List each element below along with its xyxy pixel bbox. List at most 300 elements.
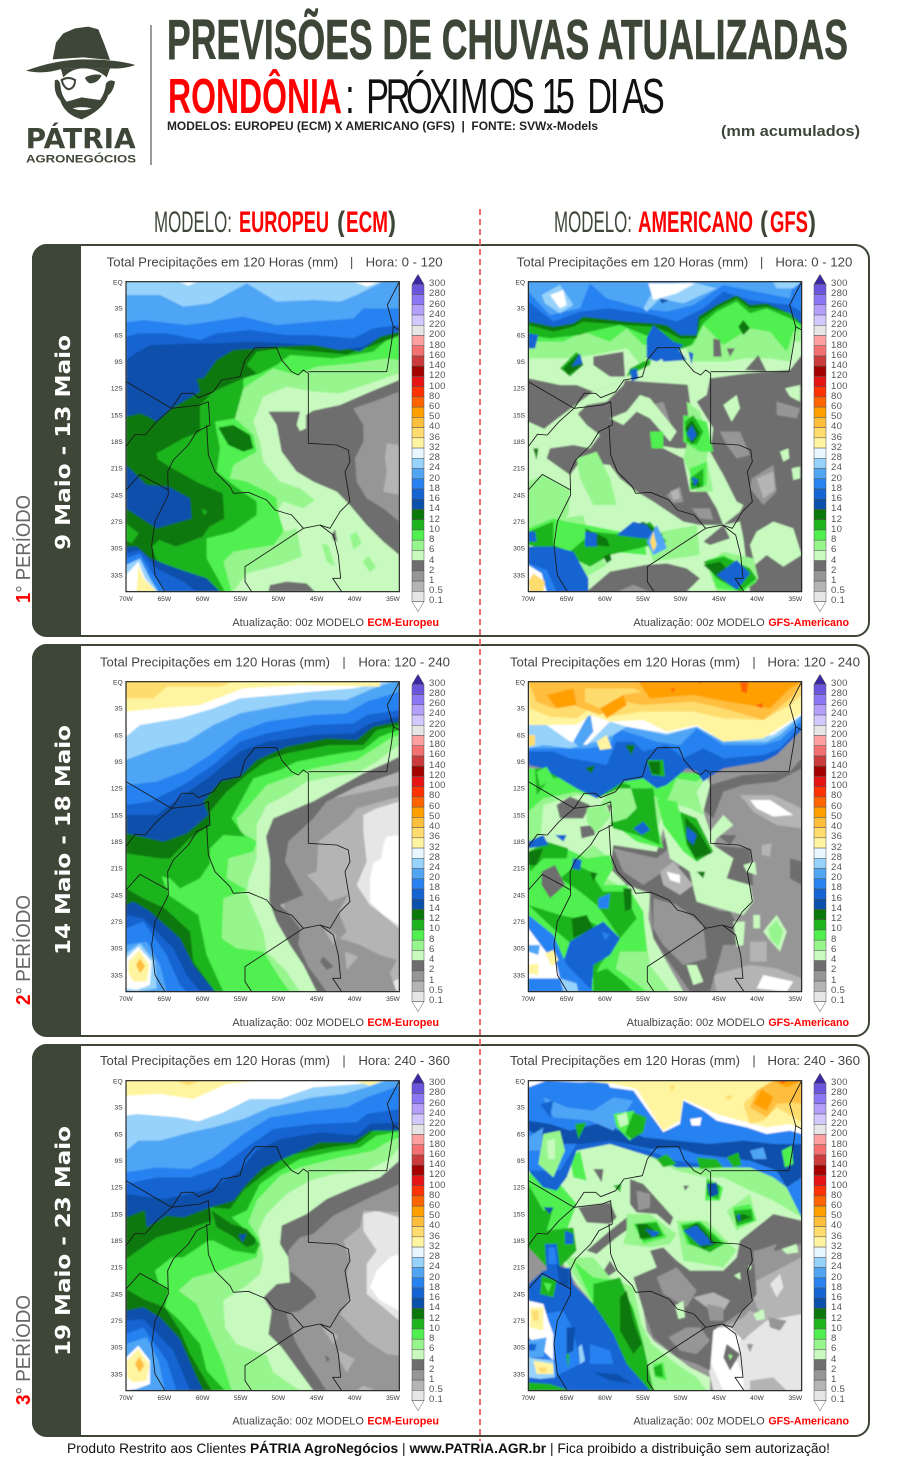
map panel: GFS 240-360: 220 bbox=[831, 1118, 848, 1129]
map panel: GFS 0-120: 200 bbox=[831, 329, 848, 340]
map panel: ECM 240-360: 60W bbox=[196, 1395, 210, 1402]
map panel: GFS 120-240: 4 bbox=[831, 954, 837, 965]
map panel: GFS 120-240: | bbox=[752, 655, 756, 669]
map panel: GFS 0-120: 50 bbox=[831, 411, 842, 422]
map panel: ECM 0-120 bbox=[106, 256, 446, 629]
map panel: GFS 120-240: 140 bbox=[831, 760, 848, 771]
map panel: ECM 120-240: 9S bbox=[115, 759, 123, 766]
map panel: GFS 0-120: 4 bbox=[831, 555, 837, 566]
map panel: ECM 240-360: 55W bbox=[234, 1395, 248, 1402]
map panel: GFS 240-360: 180 bbox=[831, 1139, 848, 1150]
map panel: ECM 120-240: 6 bbox=[429, 944, 435, 955]
map panel: GFS 120-240: 2 bbox=[831, 964, 837, 975]
map panel: ECM 120-240: 60 bbox=[429, 801, 440, 812]
map panel: ECM 120-240: 35W bbox=[386, 996, 401, 1003]
map panel: ECM 0-120: 0.5 bbox=[429, 585, 443, 596]
colour legend bbox=[412, 674, 424, 1011]
panel: 1st period bbox=[12, 244, 870, 637]
map panel: GFS 240-360: EQ bbox=[515, 1078, 525, 1085]
map panel: GFS 0-120: 3S bbox=[517, 306, 526, 313]
map panel: ECM 120-240: 10 bbox=[429, 923, 440, 934]
map panel: ECM 0-120: 80 bbox=[429, 391, 440, 402]
map panel: GFS 240-360: 6 bbox=[831, 1343, 837, 1354]
colour legend bbox=[814, 674, 826, 1011]
map panel: GFS 120-240: 200 bbox=[831, 729, 848, 740]
map panel: ECM 120-240: 260 bbox=[429, 698, 446, 709]
map panel: ECM 0-120: 240 bbox=[429, 309, 446, 320]
map panel: ECM 0-120: 12 bbox=[429, 514, 440, 525]
map panel: GFS 0-120: 27S bbox=[513, 519, 526, 526]
map panel: GFS 0-120: 80 bbox=[831, 391, 842, 402]
map panel: ECM 0-120: EQ bbox=[113, 279, 123, 286]
map panel: ECM 120-240: 300 bbox=[429, 678, 446, 689]
map panel: ECM 240-360: 33S bbox=[111, 1371, 123, 1378]
map panel: ECM 240-360: 27S bbox=[111, 1318, 123, 1325]
map panel: GFS 0-120: 30S bbox=[513, 546, 526, 553]
map panel: ECM 240-360: 18 bbox=[429, 1282, 440, 1293]
map panel: ECM 120-240: Total Precipitações em 120 Horas (mm) bbox=[100, 655, 330, 669]
map panel: GFS 240-360: 40W bbox=[750, 1395, 765, 1402]
title: (mm acumulados) bbox=[721, 123, 860, 140]
map panel: ECM 240-360: 70W bbox=[119, 1395, 134, 1402]
panel: 2nd period bbox=[12, 644, 870, 1037]
map panel: GFS 120-240 bbox=[510, 655, 860, 1029]
map panel: ECM 120-240 bbox=[100, 655, 450, 1029]
map panel: ECM 240-360: 180 bbox=[429, 1139, 446, 1150]
map panel: ECM 120-240: 24 bbox=[429, 862, 440, 873]
map panel: GFS 120-240: Hora: 120 - 240 bbox=[767, 655, 860, 669]
map panel: ECM 0-120: 40 bbox=[429, 421, 440, 432]
footer notice: Produto Restrito aos Clientes PÁTRIA AgroNegócios | www.PATRIA.AGR.br | Fica proibido a distribuição sem autorização! bbox=[67, 1440, 830, 1456]
map panel: GFS 120-240: 6S bbox=[517, 732, 526, 739]
map panel: GFS 120-240: 16 bbox=[831, 893, 842, 904]
map panel: GFS 120-240: 0.5 bbox=[831, 985, 845, 996]
map panel: GFS 0-120: 260 bbox=[831, 299, 848, 310]
map panel: GFS 120-240: 70W bbox=[521, 996, 536, 1003]
map panel: ECM 0-120: 200 bbox=[429, 329, 446, 340]
map panel: ECM 240-360: 6S bbox=[115, 1131, 123, 1138]
map panel: ECM 120-240: 45W bbox=[310, 996, 324, 1003]
map panel: ECM 0-120: 12S bbox=[111, 386, 123, 393]
map panel: ECM 120-240: 160 bbox=[429, 749, 446, 760]
center dashed separator bbox=[479, 209, 481, 1441]
map panel: ECM 0-120: 30S bbox=[111, 546, 123, 553]
map panel: GFS 0-120: 240 bbox=[831, 309, 848, 320]
map panel: ECM 0-120: 140 bbox=[429, 360, 446, 371]
map panel: GFS 120-240: 3S bbox=[517, 705, 526, 712]
period labels: 3° PERÍODO bbox=[12, 1295, 35, 1405]
map panel: ECM 0-120: | bbox=[350, 256, 353, 270]
map panel: ECM 240-360: 24S bbox=[111, 1291, 123, 1298]
map panel: GFS 240-360: 65W bbox=[560, 1395, 574, 1402]
map panel: GFS 240-360: 55W bbox=[636, 1395, 651, 1402]
map panel: ECM 120-240: 180 bbox=[429, 739, 446, 750]
map panel: GFS 120-240: 180 bbox=[831, 739, 848, 750]
map panel: GFS 0-120: 16 bbox=[831, 493, 842, 504]
map panel: GFS 0-120: 6 bbox=[831, 544, 837, 555]
rainfall map bbox=[523, 676, 807, 996]
map panel: ECM 0-120: 27S bbox=[111, 519, 123, 526]
map panel: GFS 240-360: 18 bbox=[831, 1282, 842, 1293]
map panel: ECM 120-240: 200 bbox=[429, 729, 446, 740]
map panel: GFS 240-360: 45W bbox=[712, 1395, 727, 1402]
map panel: GFS 0-120: 32 bbox=[831, 442, 842, 453]
map panel: ECM 0-120: Total Precipitações em 120 Horas (mm) bbox=[107, 256, 338, 270]
map panel: ECM 120-240: 80 bbox=[429, 790, 440, 801]
map panel: GFS 120-240: 9S bbox=[517, 759, 526, 766]
map panel: GFS 120-240: EQ bbox=[515, 679, 525, 686]
map panel: ECM 240-360: 65W bbox=[157, 1395, 172, 1402]
map panel: ECM 120-240: 0.5 bbox=[429, 985, 443, 996]
map panel: ECM 240-360: 120 bbox=[429, 1169, 446, 1180]
map panel: ECM 240-360: 28 bbox=[429, 1251, 440, 1262]
map panel: ECM 240-360: 14 bbox=[429, 1302, 440, 1313]
map panel: GFS 240-360: Hora: 240 - 360 bbox=[767, 1054, 860, 1068]
map panel: GFS 240-360: GFS-Americano bbox=[768, 1415, 849, 1427]
title: :PRÓXIMOS15DIAS bbox=[345, 69, 665, 123]
map panel: ECM 120-240: 50W bbox=[271, 996, 286, 1003]
map panel: GFS 120-240: 24 bbox=[831, 862, 842, 873]
map panel: ECM 240-360: 6 bbox=[429, 1343, 435, 1354]
map panel: ECM 120-240: | bbox=[342, 655, 346, 669]
map panel: GFS 0-120: 60W bbox=[598, 596, 613, 603]
map panel: ECM 0-120: 55W bbox=[234, 596, 248, 603]
colour legend bbox=[412, 1073, 424, 1411]
map panel: GFS 120-240: 18 bbox=[831, 882, 842, 893]
map panel: GFS 120-240: 55W bbox=[636, 996, 651, 1003]
map panel: ECM 240-360: 21S bbox=[111, 1265, 123, 1272]
map panel: GFS 0-120: 300 bbox=[831, 278, 848, 289]
map panel: ECM 120-240: 1 bbox=[429, 975, 435, 986]
map panel: GFS 120-240: 20 bbox=[831, 872, 842, 883]
map panel: ECM 240-360: | bbox=[342, 1054, 346, 1068]
map panel: ECM 120-240: 15S bbox=[111, 812, 123, 819]
map panel: GFS 240-360: 160 bbox=[831, 1149, 848, 1160]
map panel: ECM 0-120: 60W bbox=[196, 596, 210, 603]
map panel: ECM 120-240: 32 bbox=[429, 842, 440, 853]
map panel: GFS 120-240: 300 bbox=[831, 678, 848, 689]
map panel: ECM 120-240: 12 bbox=[429, 913, 440, 924]
map panel: ECM 240-360: 1 bbox=[429, 1374, 435, 1385]
map panel: GFS 240-360: 32 bbox=[831, 1241, 842, 1252]
map panel: ECM 240-360: 140 bbox=[429, 1159, 446, 1170]
map panel: GFS 0-120: 33S bbox=[513, 572, 526, 579]
map panel: ECM 0-120: 35W bbox=[386, 596, 401, 603]
map panel: GFS 0-120: 18 bbox=[831, 483, 842, 494]
map panel: GFS 120-240: Atualbização: 00z MODELO bbox=[627, 1017, 765, 1029]
rainfall map bbox=[523, 1076, 807, 1396]
map panel: ECM 120-240: 40W bbox=[348, 996, 362, 1003]
map panel: ECM 0-120: 2 bbox=[429, 565, 435, 576]
map panel: GFS 240-360: 40 bbox=[831, 1220, 842, 1231]
period labels: 1° PERÍODO bbox=[12, 495, 35, 603]
rainfall map bbox=[120, 1076, 403, 1396]
map panel: ECM 120-240: Atualização: 00z MODELO bbox=[232, 1017, 364, 1029]
period labels bbox=[12, 335, 75, 603]
map panel: GFS 240-360: 1 bbox=[831, 1374, 837, 1385]
logo: Pátria Agronegócios: PÁTRIA bbox=[26, 121, 136, 155]
logo: Pátria Agronegócios: AGRONEGÓCIOS bbox=[26, 152, 136, 165]
period labels bbox=[12, 725, 75, 1005]
map panel: GFS 240-360: 35W bbox=[788, 1395, 803, 1402]
map panel: GFS 240-360: Atualização: 00z MODELO bbox=[633, 1415, 765, 1427]
map panel: GFS 240-360: 0.5 bbox=[831, 1384, 845, 1395]
map panel: GFS 240-360: 200 bbox=[831, 1128, 848, 1139]
map panel: GFS 0-120: 35W bbox=[788, 596, 803, 603]
map panel: GFS 240-360: 14 bbox=[831, 1302, 842, 1313]
map panel: GFS 240-360: 15S bbox=[513, 1211, 526, 1218]
map panel: GFS 0-120: 120 bbox=[831, 370, 848, 381]
map panel: ECM 240-360: 0.5 bbox=[429, 1384, 443, 1395]
colour legend bbox=[814, 1073, 826, 1411]
map panel: GFS 120-240: 160 bbox=[831, 749, 848, 760]
map panel: GFS 120-240: 21S bbox=[513, 865, 526, 872]
map panel: ECM 0-120: 65W bbox=[157, 596, 172, 603]
map panel: ECM 240-360: 200 bbox=[429, 1128, 446, 1139]
map panel: GFS 240-360: 4 bbox=[831, 1354, 837, 1365]
map panel: ECM 240-360: Hora: 240 - 360 bbox=[358, 1054, 450, 1068]
map panel: ECM 0-120: 20 bbox=[429, 473, 440, 484]
map panel: GFS 0-120: 6S bbox=[517, 332, 526, 339]
map panel: ECM 120-240: 27S bbox=[111, 919, 123, 926]
map panel: ECM 0-120: 70W bbox=[119, 596, 134, 603]
map panel: ECM 120-240: 280 bbox=[429, 688, 446, 699]
period labels: 14 Maio - 18 Maio bbox=[51, 725, 75, 955]
map panel: GFS 120-240: 80 bbox=[831, 790, 842, 801]
map panel: GFS 0-120: 1 bbox=[831, 575, 837, 586]
map panel: GFS 0-120: 50W bbox=[674, 596, 688, 603]
map panel: ECM 240-360: 30S bbox=[111, 1345, 123, 1352]
map panel: ECM 120-240: 30S bbox=[111, 945, 123, 952]
map panel: GFS 240-360: 12S bbox=[513, 1185, 526, 1192]
period labels: 19 Maio - 23 Maio bbox=[51, 1126, 75, 1356]
map panel: ECM 120-240: 36 bbox=[429, 831, 440, 842]
map panel: GFS 0-120: Atualização: 00z MODELO bbox=[633, 617, 765, 629]
map panel: GFS 120-240: 15S bbox=[513, 812, 526, 819]
rainfall map bbox=[120, 676, 403, 996]
map panel: GFS 0-120: 45W bbox=[712, 596, 727, 603]
map panel: GFS 240-360: 24S bbox=[513, 1291, 526, 1298]
map panel: ECM 0-120: 18S bbox=[111, 439, 123, 446]
map panel: GFS 120-240: 120 bbox=[831, 770, 848, 781]
map panel: GFS 0-120: 70W bbox=[521, 596, 536, 603]
map panel: GFS 0-120: 0.5 bbox=[831, 585, 845, 596]
map panel: ECM 240-360: 60 bbox=[429, 1200, 440, 1211]
map panel: GFS 240-360: 18S bbox=[513, 1238, 526, 1245]
map panel: GFS 240-360: 10 bbox=[831, 1323, 842, 1334]
map panel: ECM 240-360: 80 bbox=[429, 1190, 440, 1201]
map panel: GFS 0-120: 12S bbox=[513, 386, 526, 393]
map panel: ECM 240-360: 2 bbox=[429, 1364, 435, 1375]
map panel: ECM 0-120: 1 bbox=[429, 575, 435, 586]
map panel: ECM 0-120: 60 bbox=[429, 401, 440, 412]
map panel: GFS 240-360: 8 bbox=[831, 1333, 837, 1344]
map panel: ECM 240-360: 18S bbox=[111, 1238, 123, 1245]
map panel: ECM 120-240: 220 bbox=[429, 719, 446, 730]
map panel: ECM 0-120: 14 bbox=[429, 503, 440, 514]
model heading: Europeu bbox=[154, 206, 396, 237]
period labels: 9 Maio - 13 Maio bbox=[51, 335, 75, 550]
map panel: ECM 0-120: 40W bbox=[348, 596, 362, 603]
map panel: GFS 240-360 bbox=[510, 1054, 860, 1427]
map panel: ECM 0-120: 6 bbox=[429, 544, 435, 555]
map panel: GFS 240-360: 33S bbox=[513, 1371, 526, 1378]
map panel: GFS 240-360: 9S bbox=[517, 1158, 526, 1165]
map panel: ECM 120-240: 3S bbox=[115, 705, 123, 712]
map panel: ECM 0-120: 9S bbox=[115, 359, 123, 366]
map panel: ECM 120-240: 33S bbox=[111, 972, 123, 979]
map panel: ECM 240-360: 4 bbox=[429, 1354, 435, 1365]
map panel: ECM 0-120: 24S bbox=[111, 492, 123, 499]
map panel: GFS 0-120: | bbox=[760, 256, 763, 270]
map panel: ECM 240-360: 260 bbox=[429, 1098, 446, 1109]
map panel: ECM 0-120: Hora: 0 - 120 bbox=[366, 256, 443, 270]
map panel: GFS 240-360: 50 bbox=[831, 1210, 842, 1221]
map panel: ECM 240-360: 45W bbox=[310, 1395, 324, 1402]
map panel: GFS 120-240: 24S bbox=[513, 892, 526, 899]
map panel: ECM 0-120: 33S bbox=[111, 572, 123, 579]
map panel: GFS 240-360: 60 bbox=[831, 1200, 842, 1211]
map panel: ECM 240-360: 3S bbox=[115, 1105, 123, 1112]
map panel: GFS 120-240: 8 bbox=[831, 934, 837, 945]
map panel: GFS 240-360: 12 bbox=[831, 1313, 842, 1324]
map panel: ECM 0-120: ECM-Europeu bbox=[367, 617, 439, 629]
map panel: GFS 0-120: 8 bbox=[831, 534, 837, 545]
map panel: ECM 120-240: 50 bbox=[429, 811, 440, 822]
map panel: GFS 240-360: 240 bbox=[831, 1108, 848, 1119]
map panel: ECM 0-120: 8 bbox=[429, 534, 435, 545]
map panel: GFS 240-360: 300 bbox=[831, 1077, 848, 1088]
rainfall map bbox=[120, 277, 403, 597]
map panel: ECM 120-240: 65W bbox=[157, 996, 172, 1003]
map panel: GFS 0-120: 24 bbox=[831, 462, 842, 473]
map panel: GFS 240-360: 28 bbox=[831, 1251, 842, 1262]
map panel: ECM 120-240: 14 bbox=[429, 903, 440, 914]
map panel: GFS 0-120: 14 bbox=[831, 503, 842, 514]
map panel: ECM 120-240: 240 bbox=[429, 708, 446, 719]
map panel: GFS 0-120: 40 bbox=[831, 421, 842, 432]
map panel: ECM 120-240: 16 bbox=[429, 893, 440, 904]
map panel: ECM 0-120: 280 bbox=[429, 288, 446, 299]
map panel: GFS 240-360: 2 bbox=[831, 1364, 837, 1375]
map panel: GFS 240-360: 21S bbox=[513, 1265, 526, 1272]
map panel: ECM 0-120: 10 bbox=[429, 524, 440, 535]
map panel: GFS 0-120 bbox=[513, 256, 852, 629]
map panel: ECM 120-240: EQ bbox=[113, 679, 123, 686]
map panel: GFS 120-240: 45W bbox=[712, 996, 727, 1003]
map panel: ECM 240-360: 300 bbox=[429, 1077, 446, 1088]
map panel: ECM 120-240: 6S bbox=[115, 732, 123, 739]
map panel: GFS 240-360: 280 bbox=[831, 1087, 848, 1098]
map panel: GFS 240-360: 80 bbox=[831, 1190, 842, 1201]
map panel: ECM 120-240: 28 bbox=[429, 852, 440, 863]
map panel: ECM 120-240: 8 bbox=[429, 934, 435, 945]
map panel: ECM 120-240: 12S bbox=[111, 785, 123, 792]
map panel: GFS 120-240: 30S bbox=[513, 945, 526, 952]
map panel: GFS 240-360: Total Precipitações em 120 Horas (mm) bbox=[510, 1054, 740, 1068]
rainfall map bbox=[523, 277, 807, 597]
map panel: ECM 0-120: 32 bbox=[429, 442, 440, 453]
map panel: GFS 120-240: 35W bbox=[788, 996, 803, 1003]
map panel: ECM 120-240: Hora: 120 - 240 bbox=[358, 655, 450, 669]
map panel: GFS 0-120: 60 bbox=[831, 401, 842, 412]
map panel: ECM 120-240: 70W bbox=[119, 996, 134, 1003]
map panel: ECM 240-360: 280 bbox=[429, 1087, 446, 1098]
map panel: GFS 120-240: 1 bbox=[831, 975, 837, 986]
map panel: GFS 120-240: 100 bbox=[831, 780, 848, 791]
map panel: ECM 240-360: 12 bbox=[429, 1313, 440, 1324]
map panel: ECM 240-360: 160 bbox=[429, 1149, 446, 1160]
map panel: ECM 120-240: 60W bbox=[196, 996, 210, 1003]
map panel: GFS 120-240: 40 bbox=[831, 821, 842, 832]
map panel: GFS 120-240: 0.1 bbox=[831, 995, 845, 1006]
map panel: ECM 240-360: Atualização: 00z MODELO bbox=[232, 1415, 364, 1427]
map panel: ECM 0-120: 4 bbox=[429, 555, 435, 566]
map panel: GFS 120-240: Total Precipitações em 120 Horas (mm) bbox=[510, 655, 740, 669]
map panel: GFS 0-120: 24S bbox=[513, 492, 526, 499]
map panel: ECM 240-360: 240 bbox=[429, 1108, 446, 1119]
map panel: GFS 0-120: 180 bbox=[831, 340, 848, 351]
map panel: GFS 120-240: 18S bbox=[513, 839, 526, 846]
map panel: GFS 240-360: | bbox=[752, 1054, 756, 1068]
map panel: GFS 240-360: 60W bbox=[598, 1395, 613, 1402]
map panel: ECM 240-360: 50W bbox=[271, 1395, 286, 1402]
map panel: ECM 240-360: 32 bbox=[429, 1241, 440, 1252]
map panel: GFS 240-360: 260 bbox=[831, 1098, 848, 1109]
map panel: GFS 120-240: 32 bbox=[831, 842, 842, 853]
map panel: GFS 240-360: 120 bbox=[831, 1169, 848, 1180]
map panel: ECM 240-360: 36 bbox=[429, 1231, 440, 1242]
map panel: ECM 240-360: 9S bbox=[115, 1158, 123, 1165]
map panel: GFS 0-120: GFS-Americano bbox=[768, 617, 849, 629]
map panel: ECM 120-240: ECM-Europeu bbox=[367, 1017, 439, 1029]
map panel: ECM 120-240: 140 bbox=[429, 760, 446, 771]
title: MODELOS: EUROPEU (ECM) X AMERICANO (GFS) | FONTE: SVWx-Models bbox=[167, 119, 598, 133]
colour legend bbox=[412, 274, 424, 612]
map panel: GFS 0-120: Hora: 0 - 120 bbox=[775, 256, 852, 270]
map panel: GFS 120-240: 33S bbox=[513, 972, 526, 979]
map panel: GFS 240-360: 24 bbox=[831, 1261, 842, 1272]
map panel: ECM 120-240: 100 bbox=[429, 780, 446, 791]
map panel: GFS 120-240: 220 bbox=[831, 719, 848, 730]
map panel: GFS 0-120: Total Precipitações em 120 Horas (mm) bbox=[517, 256, 748, 270]
map panel: ECM 0-120: 180 bbox=[429, 340, 446, 351]
period labels bbox=[12, 1126, 75, 1405]
map panel: ECM 240-360: ECM-Europeu bbox=[367, 1415, 439, 1427]
map panel: ECM 120-240: 24S bbox=[111, 892, 123, 899]
map panel: ECM 120-240: 2 bbox=[429, 964, 435, 975]
map panel: GFS 0-120: 21S bbox=[513, 466, 526, 473]
map panel: GFS 120-240: 14 bbox=[831, 903, 842, 914]
map panel: ECM 120-240: 21S bbox=[111, 865, 123, 872]
colour legend bbox=[814, 274, 826, 612]
map panel: GFS 120-240: 28 bbox=[831, 852, 842, 863]
map panel: ECM 240-360: 40 bbox=[429, 1220, 440, 1231]
map panel: ECM 0-120: 50W bbox=[271, 596, 286, 603]
map panel: ECM 0-120: 120 bbox=[429, 370, 446, 381]
map panel: ECM 0-120: 160 bbox=[429, 350, 446, 361]
map panel: GFS 0-120: 160 bbox=[831, 350, 848, 361]
map panel: ECM 120-240: 4 bbox=[429, 954, 435, 965]
map panel: ECM 120-240: 20 bbox=[429, 872, 440, 883]
map panel: ECM 240-360: 12S bbox=[111, 1185, 123, 1192]
map panel: ECM 120-240: 18 bbox=[429, 882, 440, 893]
map panel: GFS 0-120: 140 bbox=[831, 360, 848, 371]
map panel: GFS 240-360: 0.1 bbox=[831, 1394, 845, 1405]
map panel: GFS 0-120: 10 bbox=[831, 524, 842, 535]
map panel: GFS 120-240: 10 bbox=[831, 923, 842, 934]
map panel: ECM 0-120: 28 bbox=[429, 452, 440, 463]
